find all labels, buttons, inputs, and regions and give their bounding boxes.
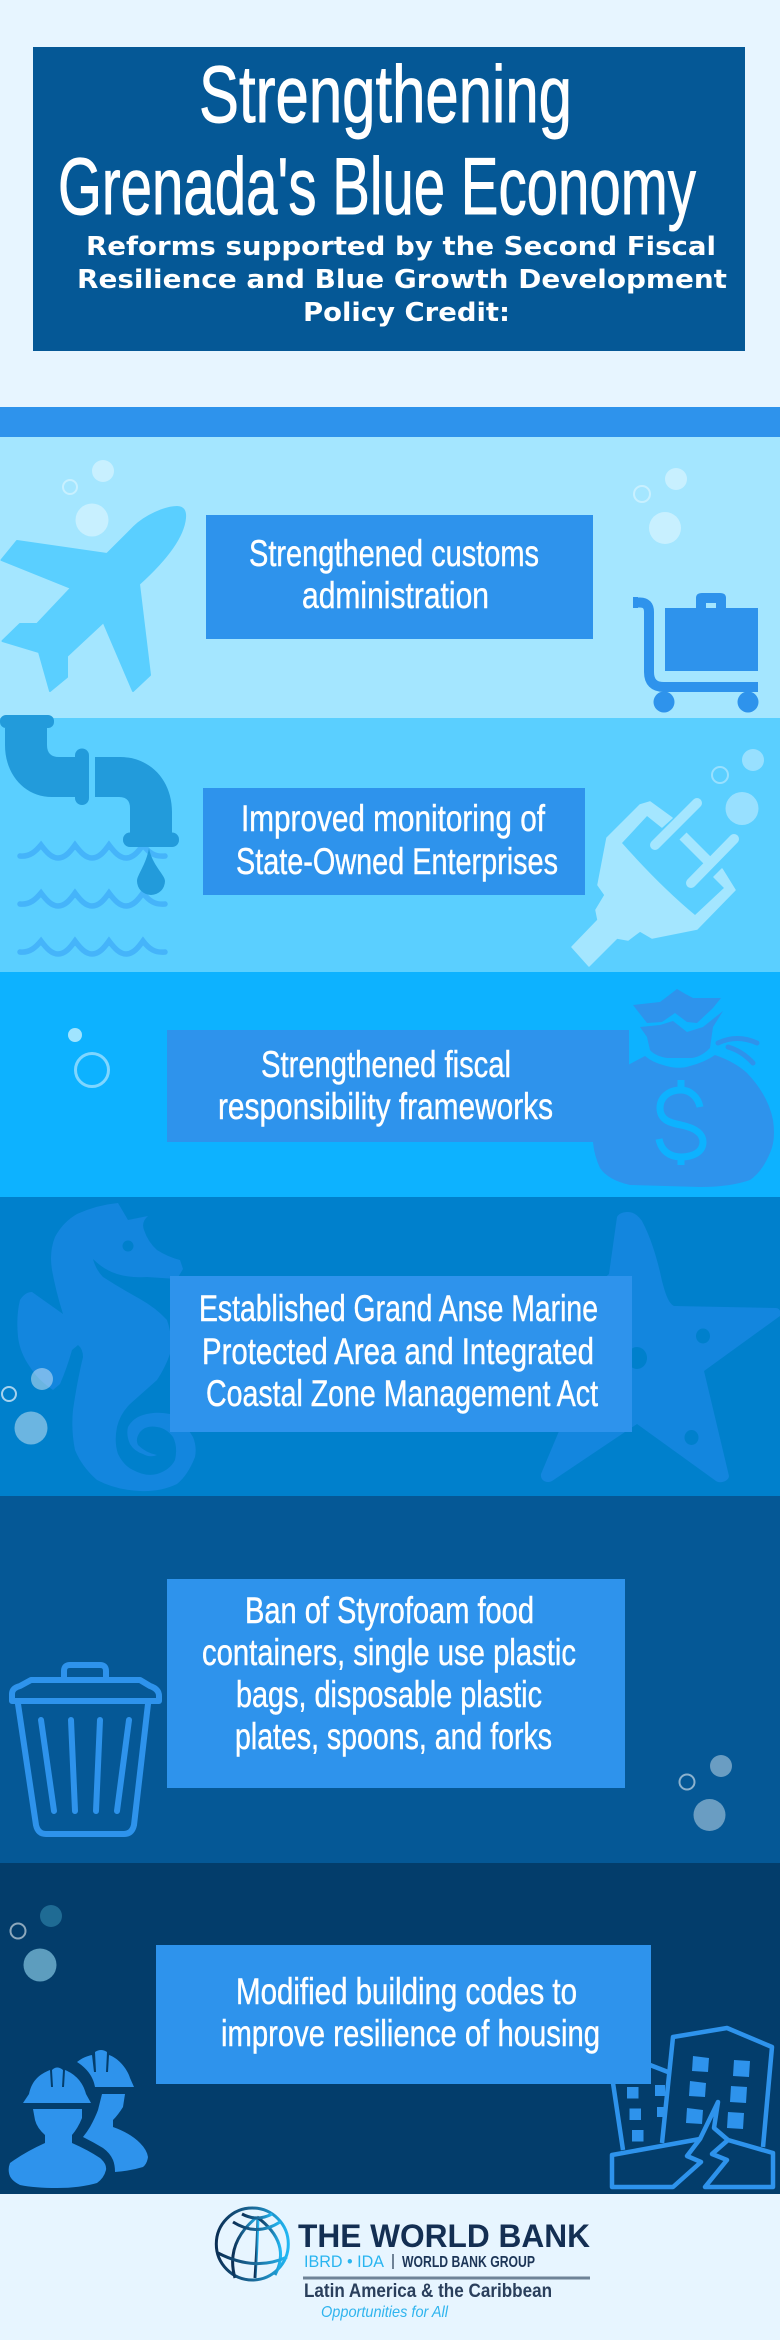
- box: monitoring text: State-Owned Enterprises: [236, 841, 558, 882]
- box: marine text: Coastal Zone Management Act: [206, 1373, 599, 1414]
- box: styrofoam text: plates, spoons, and forks: [235, 1716, 552, 1757]
- box: building codes text: improve resilience of housing: [221, 2013, 600, 2054]
- box: styrofoam text: bags, disposable plastic: [236, 1674, 542, 1715]
- box: monitoring text: Improved monitoring of: [241, 798, 546, 839]
- box: customs text: administration: [302, 575, 489, 616]
- panel: fiscal responsibility: [0, 972, 780, 1197]
- icon: cracked building: [612, 2028, 773, 2187]
- icon: workers: [9, 2050, 148, 2188]
- title: Strengthening: [199, 50, 572, 140]
- box: marine text: [170, 1276, 632, 1432]
- box: styrofoam text: Ban of Styrofoam food: [245, 1590, 534, 1631]
- panel: styrofoam ban: [0, 1496, 780, 1863]
- panel: state-owned enterprises: [0, 715, 780, 972]
- logo sub-line: [304, 2252, 535, 2271]
- box: customs text: Strengthened customs: [249, 533, 539, 574]
- bubbles: [680, 1755, 732, 1831]
- box: fiscal text: responsibility frameworks: [218, 1086, 553, 1127]
- bubbles: [68, 1028, 108, 1086]
- logo sub-line: WORLD BANK GROUP: [402, 2254, 535, 2271]
- footer logo: The World Bank: [216, 2208, 590, 2321]
- subtitle: Reforms supported by the Second Fiscal: [86, 232, 716, 262]
- logo sub-line: IBRD • IDA: [304, 2252, 385, 2271]
- top blue strip: [0, 407, 780, 437]
- icon: starfish: [500, 1212, 780, 1482]
- box: fiscal text: [167, 1030, 629, 1142]
- waves: [20, 845, 165, 954]
- subtitle: [77, 232, 727, 328]
- logo tagline: Opportunities for All: [321, 2304, 448, 2321]
- logo divider: [303, 2276, 590, 2280]
- icon: airplane: [2, 507, 185, 691]
- box: building codes text: Modified building codes to: [236, 1971, 577, 2012]
- icon: luggage cart: [633, 593, 758, 712]
- logo wordmark: THE WORLD BANK: [298, 2218, 590, 2254]
- box: marine text: Established Grand Anse Marine: [199, 1288, 598, 1329]
- bubbles: [10, 1905, 62, 1982]
- bubbles: [2, 1368, 53, 1444]
- box: marine text: Protected Area and Integrated: [202, 1331, 594, 1372]
- icon: money bag: [593, 989, 774, 1187]
- bubbles left: [63, 460, 114, 536]
- logo region: Latin America & the Caribbean: [304, 2281, 552, 2302]
- box: styrofoam text: containers, single use plastic: [202, 1632, 576, 1673]
- box: monitoring text: [203, 788, 585, 895]
- icon: trash can: [12, 1665, 159, 1834]
- box: customs text: [206, 515, 593, 639]
- panel: marine protected area: [0, 1197, 780, 1496]
- box: fiscal text: Strengthened fiscal: [261, 1044, 511, 1085]
- title: [58, 50, 696, 232]
- panel: building codes: [0, 1863, 780, 2194]
- icon: leaking pipe: [0, 715, 179, 895]
- panel: customs administration: [0, 437, 780, 718]
- icon: seahorse: [17, 1203, 196, 1491]
- bubbles: [712, 749, 764, 825]
- box: styrofoam text: [167, 1579, 625, 1788]
- bubbles right: [634, 468, 687, 544]
- subtitle: Policy Credit:: [303, 298, 510, 328]
- globe icon: [216, 2208, 288, 2280]
- icon: plug: [572, 802, 735, 966]
- subtitle: Resilience and Blue Growth Development: [77, 265, 727, 295]
- box: building codes text: [156, 1945, 651, 2084]
- header panel: [33, 47, 745, 351]
